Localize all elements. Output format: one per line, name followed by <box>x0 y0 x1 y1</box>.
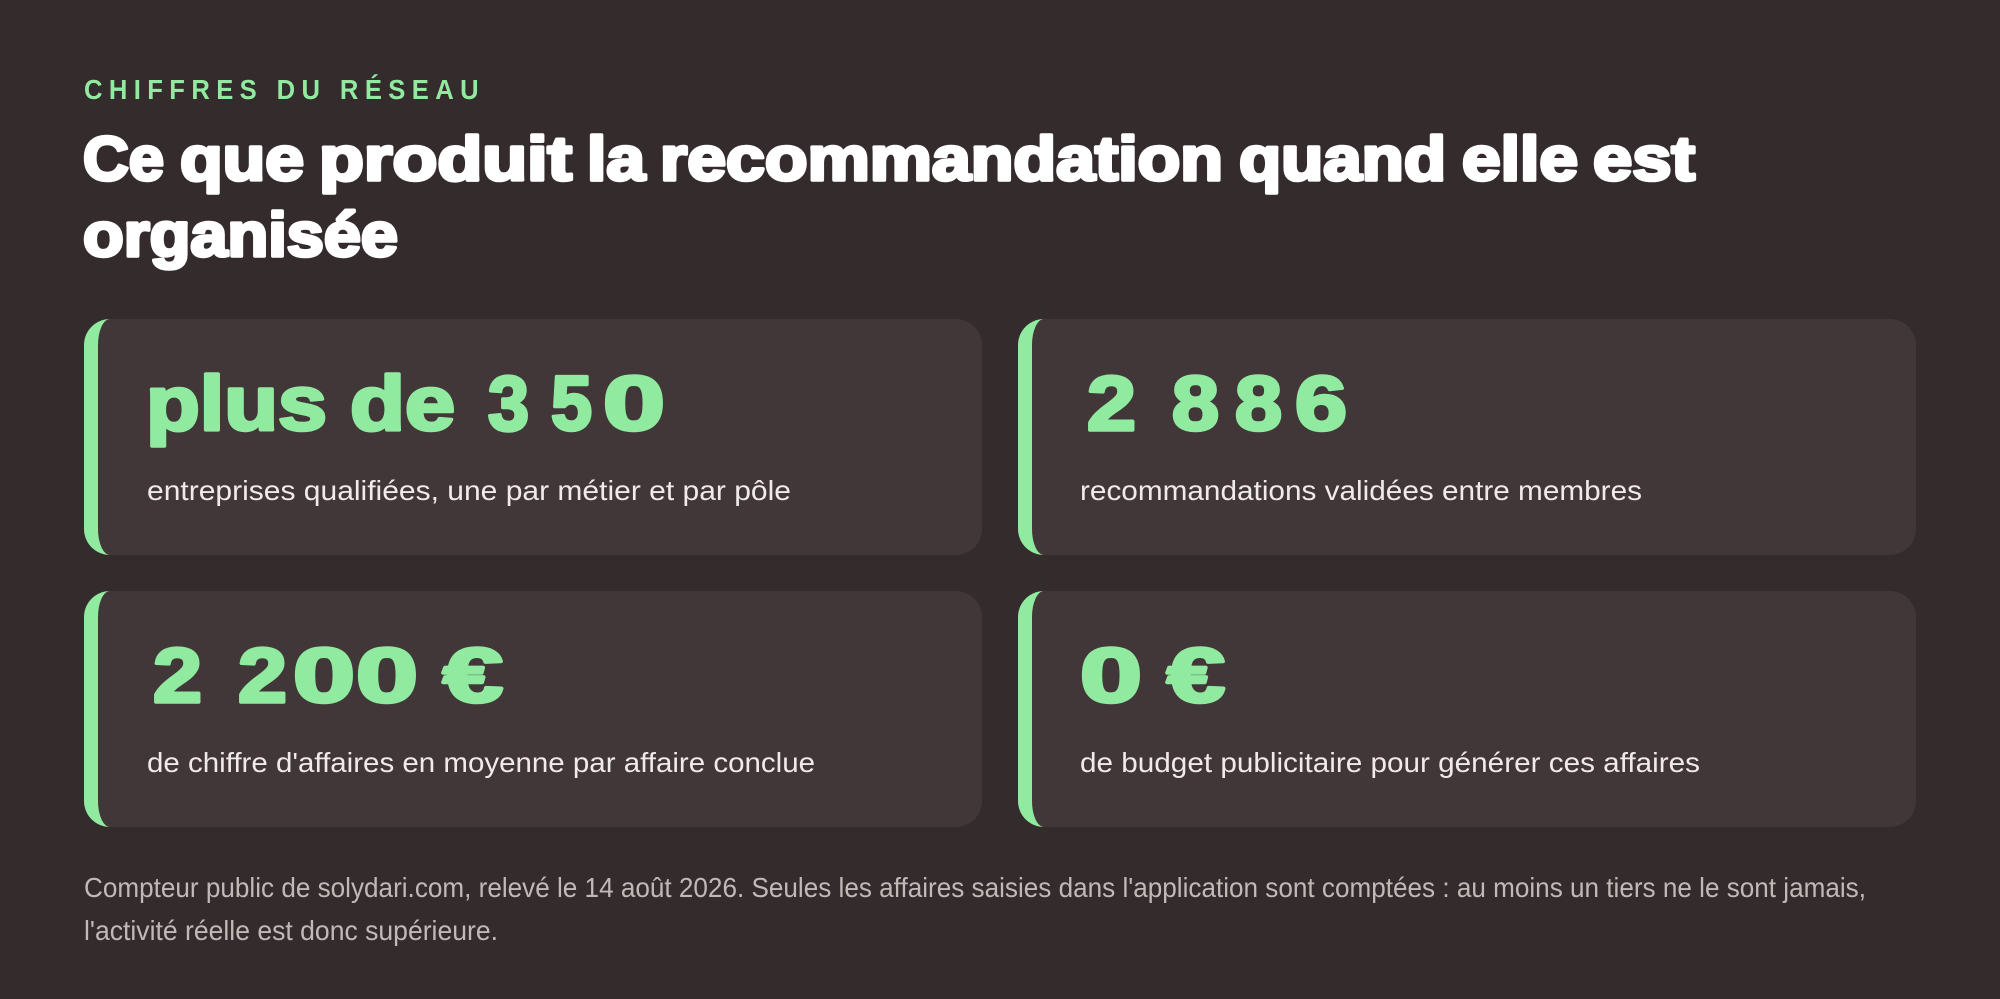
stat: plus de 350: 3 <box>488 361 529 447</box>
footnote: l'activité réelle est donc supérieure. <box>84 915 498 946</box>
stat: 2 886: 8 <box>1172 361 1219 447</box>
title <box>83 125 1696 271</box>
title: produit <box>319 125 572 194</box>
label: entreprises qualifiées, une par métier et par pôle <box>147 475 791 506</box>
title: est <box>1593 125 1695 194</box>
stat: 0 €: € <box>1167 633 1225 719</box>
title: Ce <box>83 125 164 194</box>
stat: 2 200 €: € <box>443 633 503 719</box>
stat: 2 200 €: 2 <box>238 633 287 719</box>
title: elle <box>1462 125 1578 194</box>
panel: recommandations validées <box>1018 319 1916 555</box>
stat: plus de 350: 0 <box>603 361 665 447</box>
stat: plus de 350: 5 <box>551 361 592 447</box>
footnote: Compteur public de solydari.com, relevé le 14 août 2026. Seules les affaires saisies dans l'application sont comptées : au moins un tiers ne le sont jamais, <box>84 872 1866 903</box>
title: organisée <box>83 201 398 270</box>
stat: 0 €: 0 <box>1080 633 1142 719</box>
panel: budget publicitaire <box>1018 591 1916 827</box>
label: de chiffre d'affaires en moyenne par affaire conclue <box>147 747 815 778</box>
title: la <box>587 125 646 194</box>
stat: 2 886: 2 <box>1087 361 1136 447</box>
title: que <box>180 125 304 194</box>
stat: 2 200 €: 2 <box>153 633 202 719</box>
title: quand <box>1239 125 1446 194</box>
stat: 2 200 €: 0 <box>356 633 418 719</box>
stat: 2 200 €: 0 <box>293 633 355 719</box>
stat: 2 886: 6 <box>1295 361 1347 447</box>
stat: 2 886: 8 <box>1235 361 1282 447</box>
panel: chiffre d'affaires moyen <box>84 591 982 827</box>
label: recommandations validées entre membres <box>1080 475 1642 506</box>
stat: plus de 350: plus <box>146 361 327 447</box>
footnote <box>84 872 1866 946</box>
title: recommandation <box>660 125 1223 194</box>
stat: plus de 350: de <box>350 361 455 447</box>
label: de budget publicitaire pour générer ces affaires <box>1080 747 1700 778</box>
panel: entreprises qualifiées <box>84 319 982 555</box>
eyebrow heading: CHIFFRES DU RÉSEAU <box>84 74 485 105</box>
